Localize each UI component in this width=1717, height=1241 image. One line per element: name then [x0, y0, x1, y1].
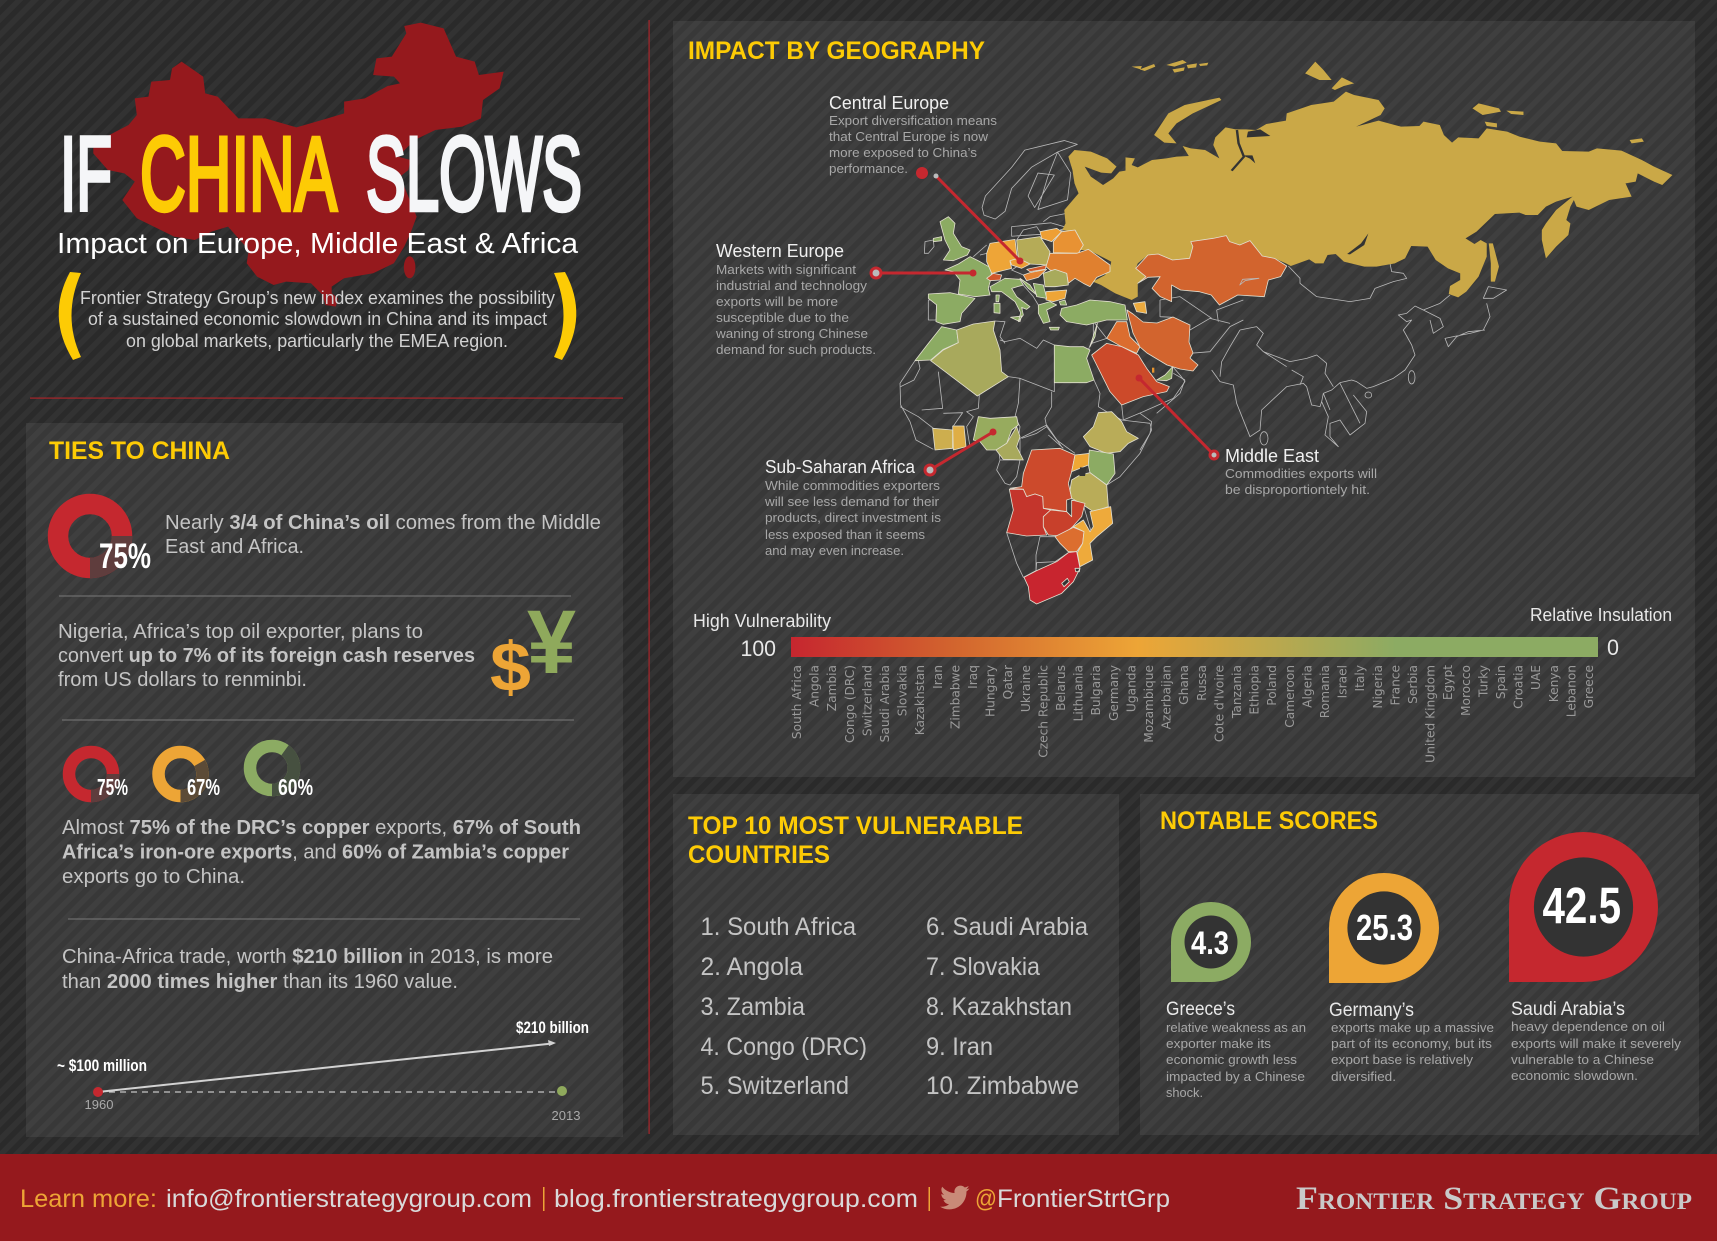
- score pin: Greece: 4.3: [1191, 925, 1229, 961]
- text: copper exports: Africa’s iron-ore exports, and 60% of Zambia’s copper: [62, 842, 569, 864]
- country ranking labels: Ethiopia: [1248, 665, 1262, 715]
- country ranking labels: Nigeria: [1371, 665, 1385, 709]
- text: Germany: [1329, 1000, 1494, 1084]
- text: Nigeria: [58, 621, 475, 691]
- heading: impact by geography: IMPACT BY GEOGRAPHY: [688, 37, 985, 65]
- map: outlined countries: [900, 141, 1507, 587]
- text: Greece: relative weakness as an: [1166, 1020, 1306, 1035]
- heading: top 10: COUNTRIES: [688, 841, 830, 869]
- text: trade: than 2000 times higher than its 1960 value.: [62, 971, 458, 993]
- callout: sub-Saharan Africa: and may even increase.: [765, 543, 904, 558]
- map of China: [93, 23, 504, 307]
- list: ranks 1 to 5: 3. Zambia: [700, 993, 805, 1021]
- heading: notable scores: NOTABLE SCORES: [1160, 807, 1378, 835]
- callout: sub-Saharan Africa: will see less demand for their: [764, 494, 940, 509]
- footer: [0, 1154, 1717, 1241]
- line chart: trade growth: 2013: [552, 1108, 580, 1123]
- text: Saudi Arabia: exports will make it severely: [1511, 1036, 1682, 1051]
- country ranking labels: Poland: [1265, 665, 1279, 706]
- intro text with parentheses: of a sustained economic slowdown in China and its impact: [88, 309, 547, 329]
- legend: vulnerability scale: [693, 605, 1672, 661]
- heading: top 10: TOP 10 MOST VULNERABLE: [688, 812, 1023, 840]
- callout: sub-Saharan Africa: While commodities exporters: [765, 478, 941, 493]
- line chart: trade growth: [57, 1018, 589, 1123]
- text: copper exports: [62, 817, 581, 888]
- country ranking labels: Italy: [1353, 665, 1367, 691]
- panel: ties to China: [26, 423, 623, 1137]
- text: Nigeria: from US dollars to renminbi.: [58, 669, 307, 691]
- text: Greece: Greece’s: [1166, 999, 1235, 1020]
- country ranking labels: Cameroon: [1283, 665, 1297, 728]
- callout: central Europe: Central Europe: [829, 92, 949, 113]
- callout: western Europe: exports will be more: [716, 294, 838, 309]
- text: trade: [62, 946, 553, 993]
- line chart: trade growth: ~ $100 million: [57, 1056, 147, 1075]
- country ranking labels: South Africa: [790, 665, 804, 739]
- donut chart: 75% oil: [58, 504, 151, 576]
- callout: central Europe: Export diversification means: [829, 113, 998, 128]
- callout: Middle East: Commodities exports will: [1225, 466, 1377, 481]
- text: Nigeria: convert up to 7% of its foreign cash reserves: [58, 645, 475, 667]
- country ranking labels: Iran: [931, 665, 945, 689]
- text: Saudi Arabia: heavy dependence on oil: [1511, 1019, 1665, 1034]
- score pin: Germany: [1329, 873, 1439, 983]
- country ranking labels: Zimbabwe: [948, 665, 962, 729]
- panel: notable scores: [1140, 794, 1699, 1135]
- country ranking labels: Czech Republic: [1036, 665, 1050, 758]
- donut chart: 75% oil: 75%: [99, 537, 151, 576]
- text: Saudi Arabia: [1511, 999, 1682, 1083]
- country ranking labels: Israel: [1336, 665, 1350, 698]
- text: Greece: [1166, 999, 1306, 1100]
- text: Germany: exports make up a massive: [1331, 1020, 1494, 1035]
- map: Iran: [1127, 310, 1198, 371]
- map: Kazakhstan: [1136, 236, 1287, 305]
- donut charts: copper and iron ore: 67%: [187, 774, 220, 800]
- country ranking labels: Hungary: [984, 665, 998, 717]
- text: copper exports: Almost 75% of the DRC’s copper exports, 67% of South: [62, 817, 581, 839]
- callout: western Europe: susceptible due to the: [716, 310, 849, 325]
- map: southern Africa vulnerability: [1007, 448, 1115, 604]
- country ranking labels: Greece: [1582, 665, 1596, 708]
- legend: vulnerability scale: Relative Insulation: [1530, 605, 1672, 625]
- country ranking labels: Saudi Arabia: [878, 665, 892, 742]
- country ranking labels: Zambia: [825, 665, 839, 711]
- text: trade: China-Africa trade, worth $210 billion in 2013, is more: [62, 946, 553, 968]
- legend: vulnerability scale: High Vulnerability: [693, 611, 831, 631]
- text: oil: East and Africa.: [165, 536, 304, 558]
- country ranking labels: Ghana: [1177, 665, 1191, 705]
- text: copper exports: exports go to China.: [62, 866, 245, 888]
- country ranking labels: Kenya: [1547, 665, 1561, 702]
- list: ranks 6 to 10: 10. Zimbabwe: [926, 1072, 1079, 1100]
- callout: western Europe: Markets with significant: [716, 262, 856, 277]
- text: Germany: diversified.: [1331, 1069, 1396, 1084]
- line chart: trade growth: 1960: [85, 1097, 113, 1112]
- country ranking labels: Tanzania: [1230, 665, 1244, 719]
- list: ranks 6 to 10: 8. Kazakhstan: [926, 993, 1072, 1021]
- country ranking labels: UAE: [1529, 665, 1543, 690]
- title: IF: [60, 116, 112, 233]
- panel: impact by geography: [673, 21, 1695, 777]
- country ranking labels: United Kingdom: [1424, 665, 1438, 763]
- country ranking labels: Uganda: [1124, 665, 1138, 712]
- list: ranks 1 to 5: 5. Switzerland: [700, 1072, 849, 1100]
- text: Greece: economic growth less: [1166, 1052, 1298, 1067]
- text: Saudi Arabia: vulnerable to a Chinese: [1511, 1052, 1654, 1067]
- title: [60, 116, 582, 233]
- callout: western Europe: waning of strong Chinese: [715, 326, 868, 341]
- icon: dollar and yen: ¥: [527, 593, 576, 693]
- donut charts: copper and iron ore: 75%: [97, 774, 128, 800]
- callout: central Europe: that Central Europe is now: [829, 129, 989, 144]
- list: ranks 1 to 5: [700, 913, 867, 1100]
- text: Germany: Germany’s: [1329, 1000, 1414, 1021]
- map: Russia: [1062, 60, 1672, 300]
- country ranking labels: Switzerland: [860, 665, 874, 736]
- callout: central Europe: performance.: [829, 161, 908, 176]
- logo: Frontier Strategy Group: Frontier Strategy Group: [1296, 1181, 1692, 1217]
- footer contact links: @: [975, 1185, 997, 1213]
- callout: sub-Saharan Africa: less exposed than it seems: [765, 527, 926, 542]
- country ranking labels: Azerbaijan: [1160, 665, 1174, 729]
- score pin: Greece: [1171, 902, 1251, 982]
- country ranking labels: Romania: [1318, 665, 1332, 718]
- score pin: Saudi Arabia: 42.5: [1542, 877, 1621, 934]
- legend: vulnerability scale: 100: [740, 636, 776, 661]
- footer contact links: Learn more:: [20, 1185, 157, 1213]
- text: Greece: exporter make its: [1166, 1036, 1272, 1051]
- icon: dollar and yen: $: [490, 628, 531, 706]
- callout: western Europe: industrial and technology: [716, 278, 868, 293]
- country ranking labels: Iraq: [966, 665, 980, 689]
- list: ranks 1 to 5: 2. Angola: [700, 953, 803, 981]
- country ranking labels: Kazakhstan: [913, 665, 927, 735]
- callout: sub-Saharan Africa: [764, 428, 996, 558]
- callout: sub-Saharan Africa: Sub-Saharan Africa: [765, 456, 916, 477]
- callout: Middle East: [1136, 374, 1377, 497]
- country ranking labels: Russa: [1195, 665, 1209, 701]
- country ranking labels: France: [1388, 665, 1402, 706]
- callout: western Europe: demand for such products.: [716, 342, 876, 357]
- text: Germany: export base is relatively: [1331, 1052, 1474, 1067]
- text: oil: [165, 512, 601, 558]
- panel: top 10 most vulnerable countries: [673, 794, 1119, 1135]
- country ranking labels: Lebanon: [1564, 665, 1578, 717]
- text: Germany: part of its economy, but its: [1331, 1036, 1493, 1051]
- icon: dollar and yen: [490, 593, 576, 706]
- country ranking labels: Germany: [1107, 665, 1121, 721]
- text: Greece: shock.: [1166, 1085, 1203, 1100]
- line chart: trade growth: $210 billion: [516, 1018, 589, 1037]
- text: Nigeria: Nigeria, Africa’s top oil exporter, plans to: [58, 621, 423, 643]
- list: ranks 6 to 10: 9. Iran: [926, 1033, 993, 1061]
- header divider: [30, 398, 623, 399]
- donut charts: copper and iron ore: 60%: [278, 774, 313, 800]
- text: oil: Nearly 3/4 of China’s oil comes from the Middle: [165, 512, 601, 534]
- callout: central Europe: more exposed to China’s: [829, 145, 978, 160]
- country ranking labels: Serbia: [1406, 665, 1420, 704]
- callout: western Europe: Western Europe: [716, 240, 844, 261]
- country ranking labels: Morocco: [1459, 665, 1473, 716]
- country ranking labels: Angola: [808, 665, 822, 707]
- callout: central Europe: [829, 92, 1024, 264]
- footer contact links: FrontierStrtGrp: [997, 1185, 1170, 1213]
- country ranking labels: Spain: [1494, 665, 1508, 699]
- text: Greece: impacted by a Chinese: [1166, 1069, 1305, 1084]
- icon: twitter bird: [940, 1186, 969, 1209]
- list: ranks 1 to 5: 4. Congo (DRC): [700, 1033, 867, 1061]
- intro text with parentheses: on global markets, particularly the EMEA region.: [126, 331, 508, 351]
- country ranking labels: Belarus: [1054, 665, 1068, 711]
- heading: top 10: [688, 812, 1023, 869]
- legend: vulnerability scale: 0: [1607, 635, 1619, 660]
- footer contact links: [20, 1185, 1170, 1213]
- country ranking labels: Lithuania: [1072, 665, 1086, 721]
- footer contact links: info@frontierstrategygroup.com: [166, 1185, 532, 1213]
- title: SLOWS: [366, 116, 582, 233]
- donut charts: copper and iron ore: [69, 746, 313, 800]
- heading: ties to China: TIES TO CHINA: [49, 437, 230, 465]
- map: Europe and Middle East vulnerability: [915, 217, 1173, 460]
- title: CHINA: [140, 116, 337, 233]
- text: Saudi Arabia: Saudi Arabia’s: [1511, 999, 1625, 1020]
- intro text with parentheses: [59, 272, 576, 360]
- country ranking labels: Croatia: [1512, 665, 1526, 709]
- callout: Middle East: be disproportiontely hit.: [1225, 482, 1370, 497]
- country ranking labels: Turky: [1476, 665, 1490, 698]
- country ranking labels: Bulgaria: [1089, 665, 1103, 716]
- country ranking labels: Cote d'Ivoire: [1212, 665, 1226, 742]
- callout: Middle East: Middle East: [1225, 445, 1319, 466]
- callout: western Europe: [715, 240, 976, 357]
- country ranking labels: Algeria: [1300, 665, 1314, 708]
- footer contact links: blog.frontierstrategygroup.com: [554, 1185, 918, 1213]
- country ranking labels: Egypt: [1441, 665, 1455, 700]
- country ranking labels: Ukraine: [1019, 665, 1033, 712]
- list: ranks 1 to 5: 1. South Africa: [700, 913, 856, 941]
- list: ranks 6 to 10: [926, 913, 1088, 1100]
- country ranking labels: Congo (DRC): [843, 665, 857, 743]
- vertical divider: [648, 20, 650, 1134]
- country ranking labels: Slovakia: [896, 665, 910, 716]
- country ranking labels: [790, 664, 1596, 763]
- list: ranks 6 to 10: 7. Slovakia: [926, 953, 1040, 981]
- list: ranks 6 to 10: 6. Saudi Arabia: [926, 913, 1088, 941]
- text: Saudi Arabia: economic slowdown.: [1511, 1068, 1638, 1083]
- subtitle: Impact on Europe, Middle East & Africa: [57, 228, 579, 260]
- country ranking labels: Mozambique: [1142, 665, 1156, 743]
- intro text with parentheses: Frontier Strategy Group’s new index examines the possibility: [80, 288, 555, 308]
- country ranking labels: Qatar: [1001, 664, 1015, 699]
- score pin: Germany: 25.3: [1356, 907, 1413, 948]
- callout: sub-Saharan Africa: products, direct investment is: [765, 510, 942, 525]
- score pin: Saudi Arabia: [1509, 832, 1658, 982]
